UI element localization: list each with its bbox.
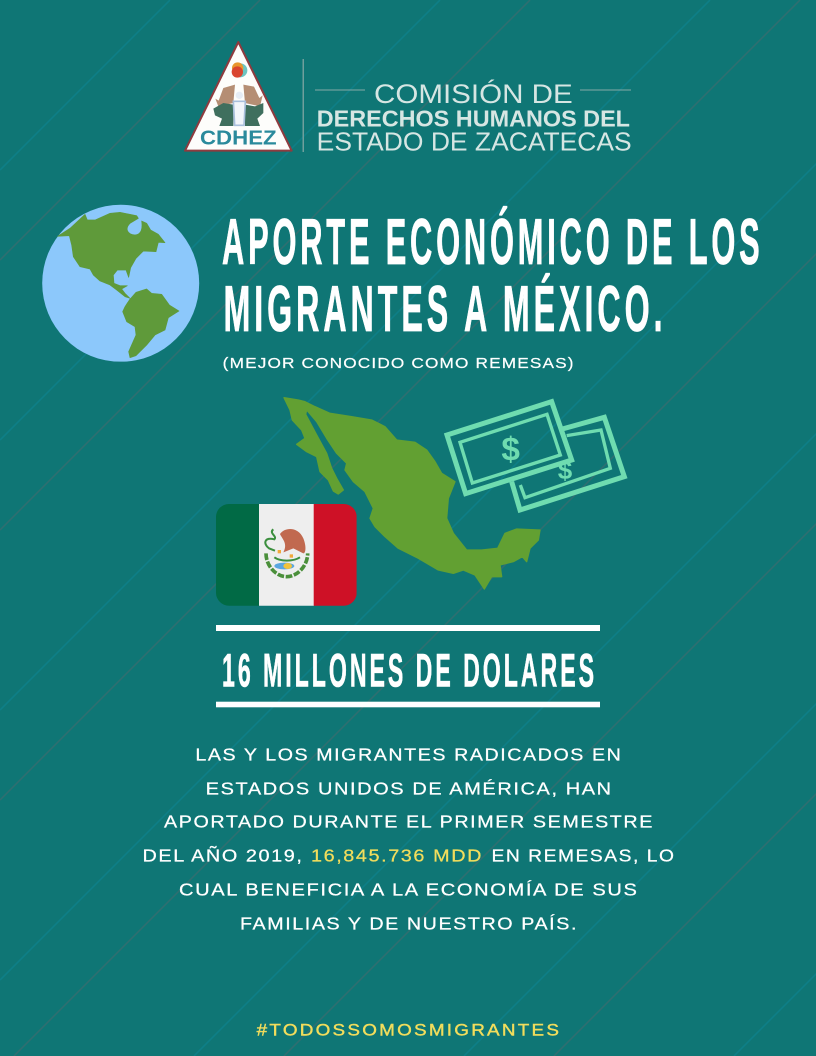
icon: banknotes [447, 402, 624, 510]
logo text [315, 78, 632, 157]
subtitle: (MEJOR CONOCIDO COMO REMESAS) [223, 355, 575, 372]
text block: remittances description: FAMILIAS Y DE NUESTRO PAÍS. [240, 914, 578, 934]
icon: globe [42, 205, 199, 362]
icon: front banknote [447, 402, 572, 494]
icon: front banknote: $ [501, 431, 520, 468]
text block: remittances description [142, 744, 676, 934]
text block: remittances description: 16,845.736 MDD [311, 846, 483, 866]
icon: back banknote: $ [558, 455, 573, 485]
logo text: DERECHOS HUMANOS DEL [317, 106, 630, 132]
highlighted figure: 16 millones de dolares [216, 625, 600, 707]
icon: Mexican flag [216, 504, 357, 606]
hashtag: #TODOSSOMOSMIGRANTES [257, 1021, 561, 1040]
text block: remittances description: ESTADOS UNIDOS DE AMÉRICA, HAN [206, 778, 613, 798]
map: Mexico [284, 398, 540, 589]
text block: remittances description: CUAL BENEFICIA A LA ECONOMÍA DE SUS [179, 880, 638, 900]
icon: CDHEZ triangle emblem: CDHEZ [200, 127, 277, 150]
divider line [302, 59, 304, 152]
text block: remittances description: EN REMESAS, LO [492, 846, 676, 866]
text block: remittances description: APORTADO DURANTE EL PRIMER SEMESTRE [164, 812, 654, 832]
icon: coat of arms [265, 529, 308, 577]
logo text: COMISIÓN DE [374, 78, 573, 109]
title [222, 206, 764, 345]
logo text: ESTADO DE ZACATECAS [317, 127, 632, 157]
icon: back banknote [512, 417, 624, 510]
text block: remittances description: LAS Y LOS MIGRANTES RADICADOS EN [195, 744, 622, 764]
text block: remittances description: DEL AÑO 2019, [142, 844, 304, 866]
logo: CDHEZ [185, 42, 632, 157]
icon: CDHEZ triangle emblem [185, 42, 292, 151]
